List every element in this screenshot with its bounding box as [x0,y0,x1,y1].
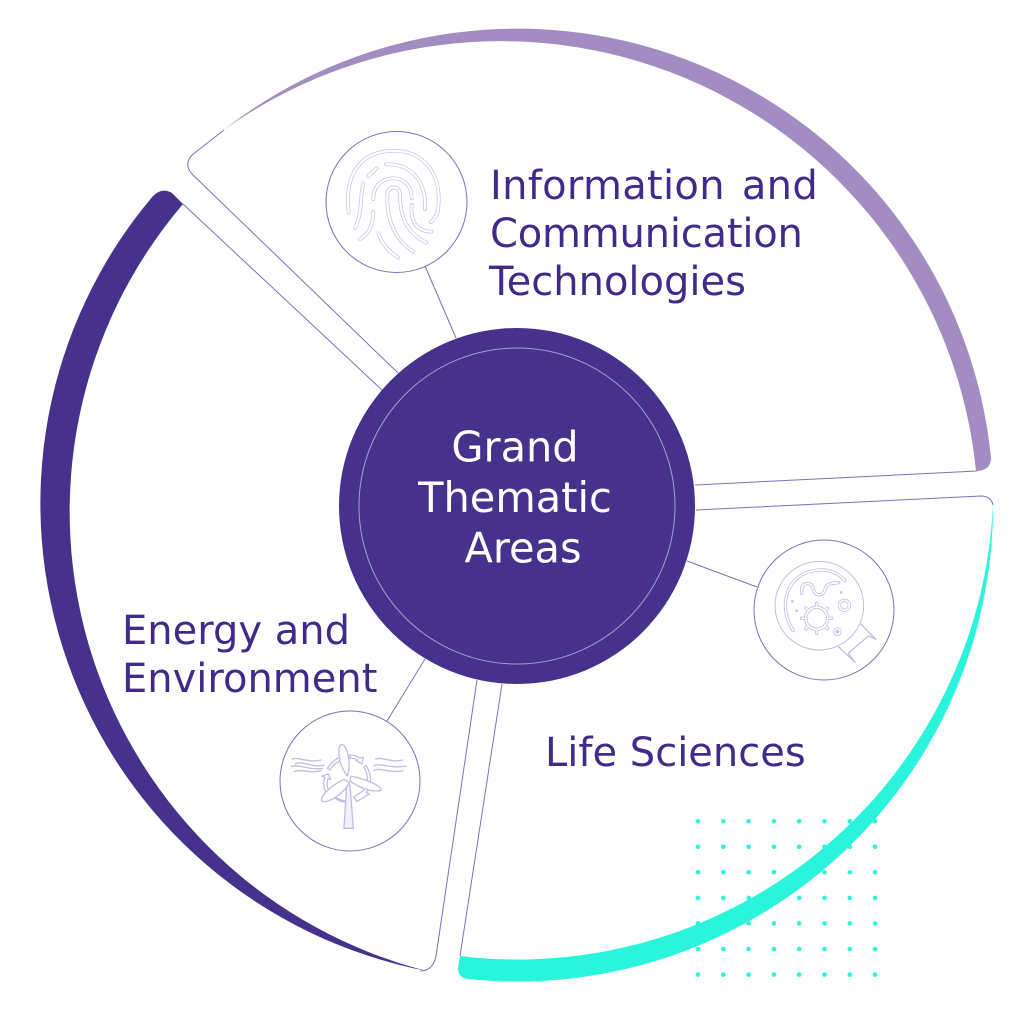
icon: petri dish [754,540,894,680]
label: ICT: Information and [490,163,818,209]
label: ICT: Technologies [488,259,746,305]
outline: energy panel [183,204,477,971]
icon: wind turbine [280,711,420,851]
hub label: Areas [464,524,582,572]
panel: life sciences [458,496,993,982]
label: life sciences: Life Sciences [545,730,806,776]
hub: grand thematic areas [339,328,695,684]
connector: life sciences icon to hub [687,561,757,587]
arc band: teal [458,503,993,982]
panel: information and communication technologies [188,29,991,485]
hub label: Grand [451,422,579,472]
label: energy: Energy and [122,608,350,654]
icon: fingerprint [326,132,467,272]
arc band: light purple [223,29,991,471]
outline: ICT panel [188,130,977,485]
dot pattern [696,819,877,977]
connector: fingerprint to hub [425,266,456,338]
arc band: dark purple [40,191,427,971]
outline: life sciences panel [460,496,993,956]
panel: energy and environment [40,191,477,971]
label: energy: Environment [122,656,377,702]
connector: wind icon to hub [387,659,425,721]
hub label: Thematic [417,473,612,522]
label: ICT: Communication [490,211,803,257]
